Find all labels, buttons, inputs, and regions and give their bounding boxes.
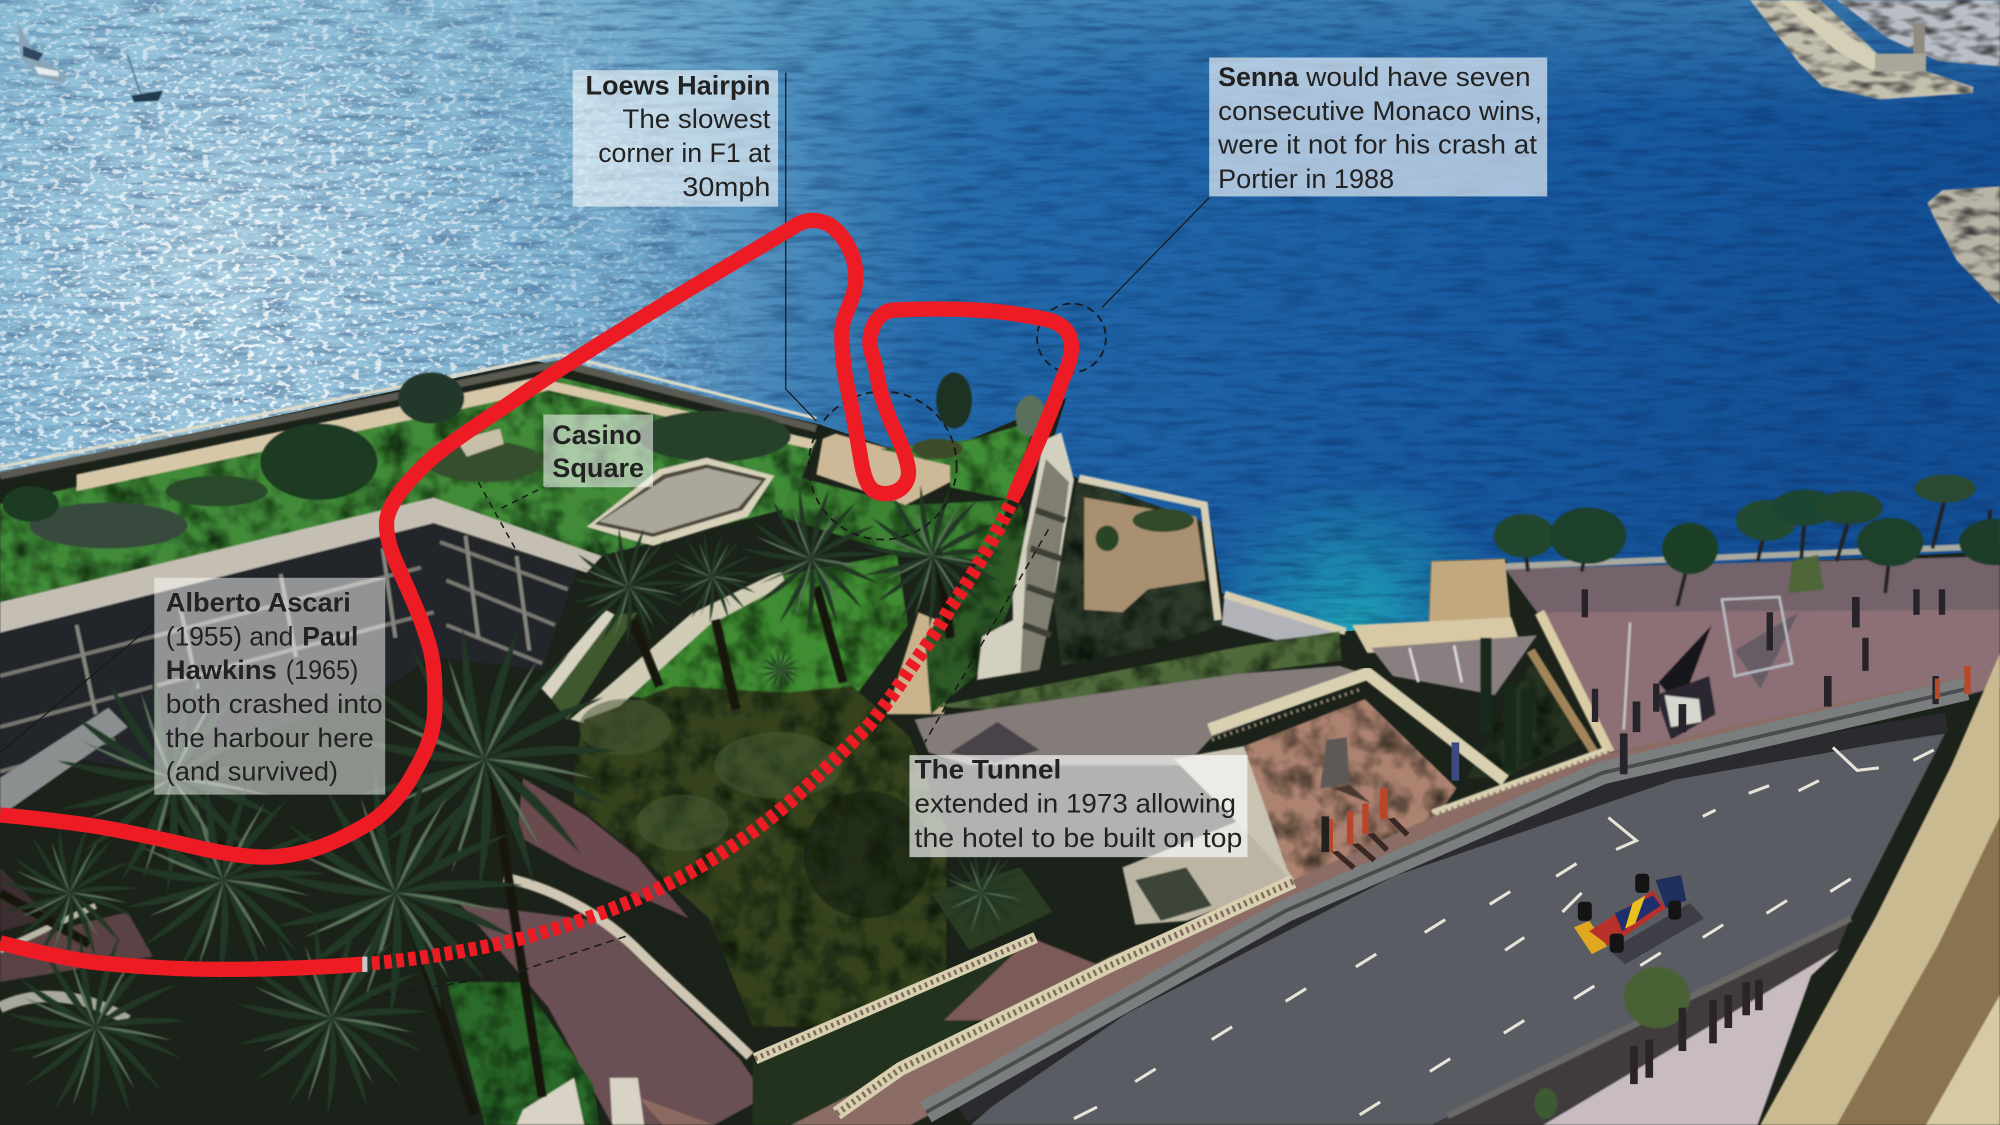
leader lines and dashed markers (0, 73, 1209, 997)
harbour jetties and yachts (1750, 0, 2000, 305)
land base (0, 361, 2000, 1125)
callout: Loews Hairpin: Loews Hairpin (585, 70, 770, 100)
track: solid section from harbour through hairpin to tunnel entrance (0, 220, 1071, 857)
callout: Senna: consecutive Monaco wins, (1218, 96, 1542, 126)
rooftop garden of the hotel (0, 355, 1046, 602)
callout: Loews Hairpin: 30mph (682, 172, 770, 202)
callout: The Tunnel: the hotel to be built on top (915, 823, 1242, 853)
marker: Portier circle (1037, 304, 1106, 372)
small sailing boat (128, 55, 163, 102)
yacht (17, 20, 68, 84)
callout: Alberto Ascari and Paul Hawkins: Hawkins (166, 655, 277, 685)
gardens, pathways and tree masses (0, 432, 1371, 1125)
callout: The Tunnel: extended in 1973 allowing (915, 788, 1236, 818)
callout: Loews Hairpin: The slowest (622, 104, 771, 134)
spectators and marshals (1321, 589, 1971, 1084)
sidewalk, lower barrier and building corner (1432, 653, 2000, 1125)
callout: Alberto Ascari and Paul Hawkins: (1965) (286, 655, 358, 685)
leader: Senna (1102, 198, 1209, 307)
callout: Alberto Ascari and Paul Hawkins: Paul (302, 621, 358, 651)
seafront promenade with pines (1352, 474, 2000, 778)
callout: Senna: would have seven (1305, 62, 1531, 92)
road lane markings (1074, 747, 1934, 1119)
callout: The Tunnel (909, 755, 1247, 857)
track: solid section after the tunnel (0, 943, 362, 969)
callout: Loews Hairpin: corner in F1 at (598, 138, 771, 168)
lower balustrade (755, 881, 1293, 1114)
palm trees (0, 485, 1029, 1120)
leader: Casino Square (478, 482, 548, 551)
salmon terrace with bust and balustrades (1122, 673, 1610, 925)
callout: Alberto Ascari and Paul Hawkins: Alberto Ascari (166, 588, 351, 618)
callout: Alberto Ascari and Paul Hawkins (154, 578, 385, 795)
sea (0, 0, 2000, 632)
marker: Loews Hairpin circle (809, 392, 957, 540)
callout: The Tunnel: The Tunnel (915, 755, 1061, 785)
callout: Senna (1209, 57, 1547, 196)
strip between barrier and balustrade (791, 676, 1967, 1125)
F1 car (1574, 874, 1704, 964)
road shadow and armco barrier (926, 689, 1967, 1115)
callout: Casino Square (543, 415, 653, 487)
hotel facade and windows (0, 497, 602, 816)
callout: Alberto Ascari and Paul Hawkins: (1955) and (166, 621, 293, 651)
callout: Casino Square: Square (552, 453, 644, 483)
leader: tunnel upper (925, 529, 1048, 742)
callout: Loews Hairpin (573, 70, 778, 207)
tunnel exit marker (362, 957, 367, 972)
callout: Casino Square: Casino (552, 420, 642, 450)
leader: Loews Hairpin (786, 73, 816, 421)
leader: tunnel lower (370, 932, 638, 997)
leader: Alberto Ascari harbour crash (0, 622, 156, 753)
callout: Alberto Ascari and Paul Hawkins: the harbour here (166, 723, 374, 753)
callout: Senna: Portier in 1988 (1218, 164, 1394, 194)
callout: Senna: were it not for his crash at (1217, 130, 1538, 160)
callout: Alberto Ascari and Paul Hawkins: both crashed into (166, 689, 383, 719)
track: tunnel section (dashed) (362, 494, 1015, 964)
callout: Alberto Ascari and Paul Hawkins: (and survived) (166, 757, 338, 787)
callout: Senna: Senna (1218, 62, 1300, 92)
road (971, 733, 1945, 1125)
circuit track (0, 220, 1071, 969)
